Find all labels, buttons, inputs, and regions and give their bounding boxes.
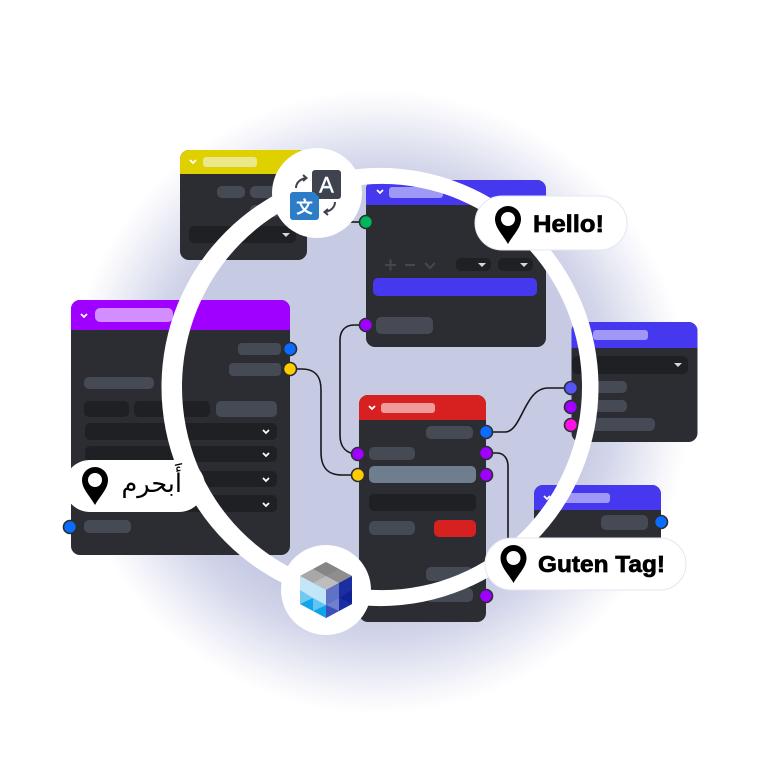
red header bbox=[359, 395, 486, 420]
connection wires bbox=[290, 222, 571, 545]
connector dots bbox=[64, 216, 668, 602]
icon: location pin bbox=[495, 206, 521, 244]
icon: hexagonal cube bbox=[300, 562, 352, 618]
purple header bbox=[71, 300, 290, 330]
label: Hello: Hello! bbox=[533, 211, 604, 238]
badge: cube logo bbox=[281, 545, 371, 635]
panel: red node bbox=[359, 395, 486, 622]
icon: letter A tile: A bbox=[319, 172, 334, 198]
badge: translate icon bbox=[272, 148, 362, 238]
yellow header bbox=[180, 150, 307, 174]
icon: location pin bbox=[82, 467, 108, 505]
panel: bottom blue node bbox=[534, 485, 661, 555]
blue header bbox=[534, 485, 661, 510]
callout: Arabic greeting bbox=[64, 460, 205, 512]
white ring bbox=[161, 168, 598, 606]
blue header bbox=[572, 322, 698, 348]
panel: right blue node bbox=[572, 322, 698, 442]
callout: Hello bbox=[475, 196, 627, 250]
label: Arabic text: أَبحرم bbox=[121, 462, 183, 499]
panel: yellow node bbox=[180, 150, 307, 260]
icon: character tile: 文 bbox=[296, 197, 313, 217]
background glow bbox=[66, 90, 690, 714]
label: Guten Tag: Guten Tag! bbox=[538, 551, 665, 577]
icon: location pin bbox=[500, 545, 526, 583]
icon: swap arrows bbox=[296, 175, 335, 215]
panel: purple node bbox=[71, 300, 290, 555]
panel: top blue node bbox=[366, 180, 546, 347]
blue header bbox=[366, 180, 546, 205]
callout: Guten Tag bbox=[485, 538, 686, 590]
